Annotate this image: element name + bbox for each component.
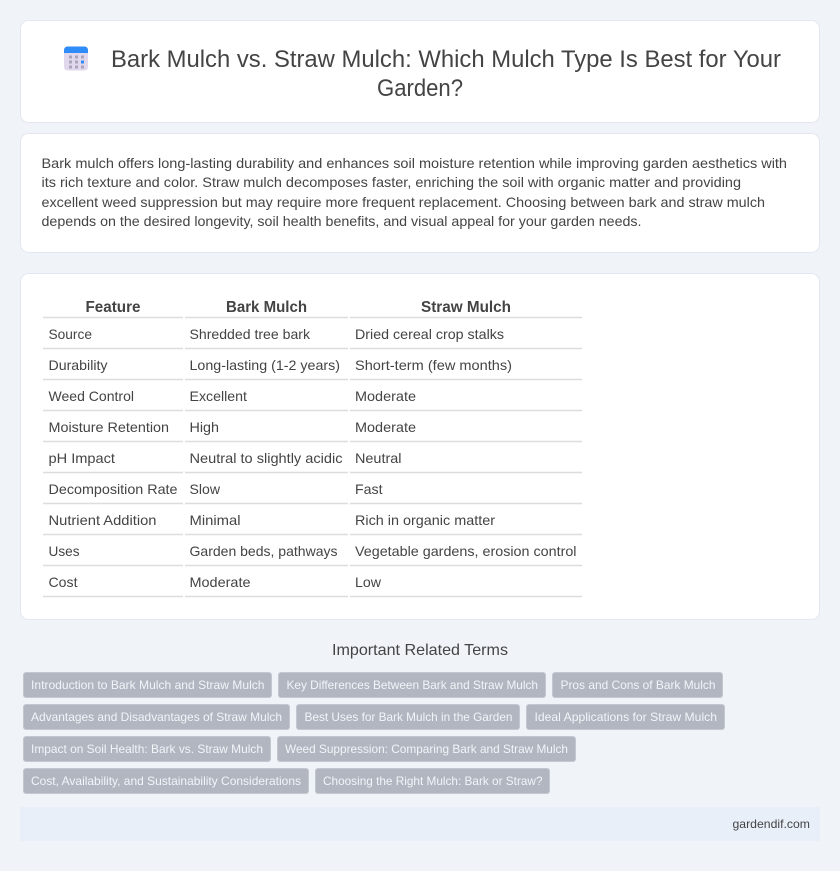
footer: gardendif.com xyxy=(732,817,810,831)
table row: nutrient addition: Minimal xyxy=(190,512,240,528)
table row: durability xyxy=(48,357,512,373)
table row: moisture retention: High xyxy=(190,419,219,435)
table row: uses: Vegetable gardens, erosion control xyxy=(355,543,576,559)
table row: moisture retention: Moderate xyxy=(355,419,416,435)
table row: cost xyxy=(48,574,382,590)
table row: cost: Cost xyxy=(48,574,78,590)
tag xyxy=(296,704,520,730)
table row: moisture retention xyxy=(48,419,416,435)
table row: weed control xyxy=(48,388,416,404)
tag xyxy=(24,704,290,730)
table header: Straw Mulch xyxy=(421,299,511,316)
tag: Advantages and Disadvantages of Straw Mulch xyxy=(31,710,282,724)
table row: source xyxy=(48,326,504,342)
table header: Feature xyxy=(86,299,141,316)
tag xyxy=(526,704,724,730)
table row: cost: Low xyxy=(355,574,382,590)
text block: summary paragraph: excellent weed suppression but may require more frequent replacement. Choosing between bark and straw mulch xyxy=(42,194,765,210)
tag: Pros and Cons of Bark Mulch xyxy=(560,678,716,692)
table row: uses: Uses xyxy=(48,543,80,559)
tag: Weed Suppression: Comparing Bark and Straw Mulch xyxy=(285,742,568,756)
tag list xyxy=(24,672,724,794)
table header: Bark Mulch xyxy=(226,299,307,316)
tag xyxy=(278,736,576,762)
tag: Ideal Applications for Straw Mulch xyxy=(534,710,717,724)
tag: Impact on Soil Health: Bark vs. Straw Mulch xyxy=(31,742,263,756)
heading: important related terms: Important Related Terms xyxy=(332,642,508,659)
table row: pH impact: Neutral to slightly acidic xyxy=(190,450,342,466)
table row: pH impact: pH Impact xyxy=(48,450,115,466)
table row: source: Source xyxy=(48,326,92,342)
table row: decomposition rate xyxy=(48,481,383,497)
title xyxy=(111,46,781,102)
table row: source: Shredded tree bark xyxy=(190,326,311,342)
text block: summary paragraph xyxy=(42,155,787,229)
table header xyxy=(86,299,511,316)
table row: pH impact xyxy=(48,450,402,466)
table row: durability: Durability xyxy=(48,357,108,373)
tag: Choosing the Right Mulch: Bark or Straw? xyxy=(323,774,543,788)
table row: decomposition rate: Decomposition Rate xyxy=(48,481,178,497)
panel: header xyxy=(20,20,820,122)
tag xyxy=(24,768,308,794)
table row: pH impact: Neutral xyxy=(355,450,402,466)
tag: Best Uses for Bark Mulch in the Garden xyxy=(304,710,512,724)
text block: summary paragraph: depends on the desired longevity, soil health benefits, and visual appeal for your garden needs. xyxy=(42,213,641,229)
table row: uses: Garden beds, pathways xyxy=(190,543,338,559)
table row: weed control: Weed Control xyxy=(48,388,134,404)
table row: cost: Moderate xyxy=(190,574,251,590)
table row: source: Dried cereal crop stalks xyxy=(355,326,504,342)
tag: Introduction to Bark Mulch and Straw Mulch xyxy=(31,678,264,692)
tag xyxy=(316,768,550,794)
table row: weed control: Moderate xyxy=(355,388,416,404)
tag xyxy=(24,736,270,762)
text block: summary paragraph: Bark mulch offers long-lasting durability and enhances soil moisture retention while improving garden aesthetics with xyxy=(42,155,787,171)
tag xyxy=(24,672,272,698)
icon: calendar xyxy=(64,46,88,70)
panel: introduction xyxy=(20,134,820,252)
table row: nutrient addition: Nutrient Addition xyxy=(48,512,156,528)
title: Bark Mulch vs. Straw Mulch: Which Mulch Type Is Best for Your xyxy=(111,46,781,73)
table row: decomposition rate: Slow xyxy=(190,481,221,497)
table row: moisture retention: Moisture Retention xyxy=(48,419,169,435)
table row: decomposition rate: Fast xyxy=(355,481,383,497)
table row: nutrient addition: Rich in organic matter xyxy=(355,512,495,528)
tag: Cost, Availability, and Sustainability Considerations xyxy=(31,774,301,788)
table row: durability: Short-term (few months) xyxy=(355,357,512,373)
footer xyxy=(20,807,820,841)
table row: weed control: Excellent xyxy=(190,388,247,404)
table row: nutrient addition xyxy=(48,512,495,528)
text block: summary paragraph: its rich texture and color. Straw mulch decomposes faster, enriching the soil with organic matter and providing xyxy=(42,174,741,190)
table row: durability: Long-lasting (1-2 years) xyxy=(190,357,340,373)
title: Garden? xyxy=(377,75,463,102)
tag xyxy=(552,672,722,698)
tag xyxy=(278,672,546,698)
panel: comparison table xyxy=(20,274,820,620)
table row: uses xyxy=(48,543,576,559)
tag: Key Differences Between Bark and Straw Mulch xyxy=(286,678,538,692)
